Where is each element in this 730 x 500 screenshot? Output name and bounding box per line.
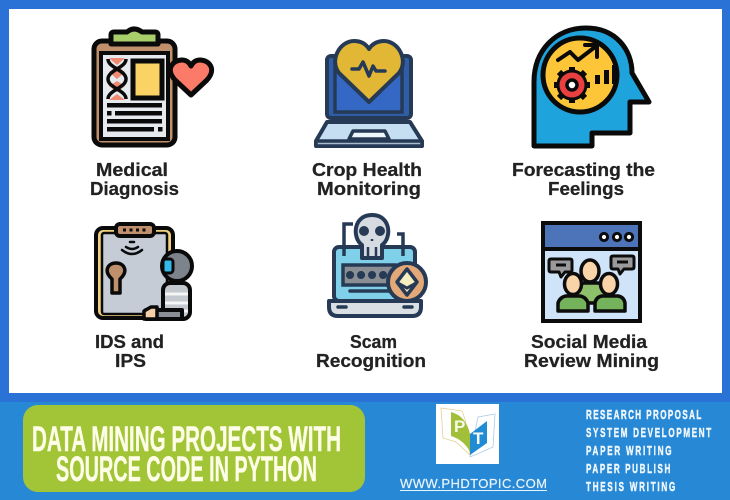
label: crop health monitoring: Crop Health — [312, 160, 422, 180]
icon: crop health laptop — [316, 41, 422, 146]
logo: PT open book — [436, 404, 499, 464]
label: medical diagnosis: Diagnosis — [90, 179, 179, 199]
logo: PT open book: T — [473, 429, 484, 448]
logo: PT open book: P — [454, 417, 465, 436]
label: IDS and IPS: IDS and — [95, 332, 164, 352]
services list: PAPER WRITING — [586, 444, 672, 459]
label: forecasting the feelings: Feelings — [548, 179, 624, 199]
title banner: DATA MINING PROJECTS WITH — [32, 420, 341, 459]
label: scam recognition — [316, 332, 426, 371]
services list: RESEARCH PROPOSAL — [586, 408, 702, 423]
title banner: SOURCE CODE IN PYTHON — [56, 450, 317, 489]
services list — [586, 408, 712, 495]
label: scam recognition: Scam — [350, 332, 397, 352]
icon: scam laptop with skull and coin — [329, 215, 426, 316]
label: IDS and IPS: IPS — [115, 351, 146, 371]
label: medical diagnosis: Medical — [96, 160, 168, 180]
services list: THESIS WRITING — [586, 480, 675, 495]
label: forecasting the feelings: Forecasting the — [512, 160, 655, 180]
label: scam recognition: Recognition — [316, 351, 426, 371]
services list: PAPER PUBLISH — [586, 462, 670, 477]
label: crop health monitoring: Monitoring — [317, 179, 421, 199]
label: medical diagnosis — [90, 160, 179, 199]
label: social media review mining — [524, 332, 659, 371]
services list: SYSTEM DEVELOPMENT — [586, 426, 712, 441]
label: social media review mining: Social Media — [531, 332, 648, 352]
label: crop health monitoring — [312, 160, 422, 199]
icon: social media review window — [543, 223, 640, 321]
label: social media review mining: Review Mining — [524, 351, 659, 371]
icon: medical clipboard with heart — [94, 29, 212, 145]
label: IDS and IPS — [95, 332, 164, 371]
icon: intrusion detection panel with robot — [96, 224, 192, 319]
icon: head with gear and chart — [534, 28, 649, 146]
title banner — [23, 405, 365, 492]
footer band — [0, 402, 730, 500]
website url: WWW.PHDTOPIC.COM — [400, 476, 547, 491]
label: forecasting the feelings — [512, 160, 655, 199]
main white panel — [9, 9, 722, 393]
